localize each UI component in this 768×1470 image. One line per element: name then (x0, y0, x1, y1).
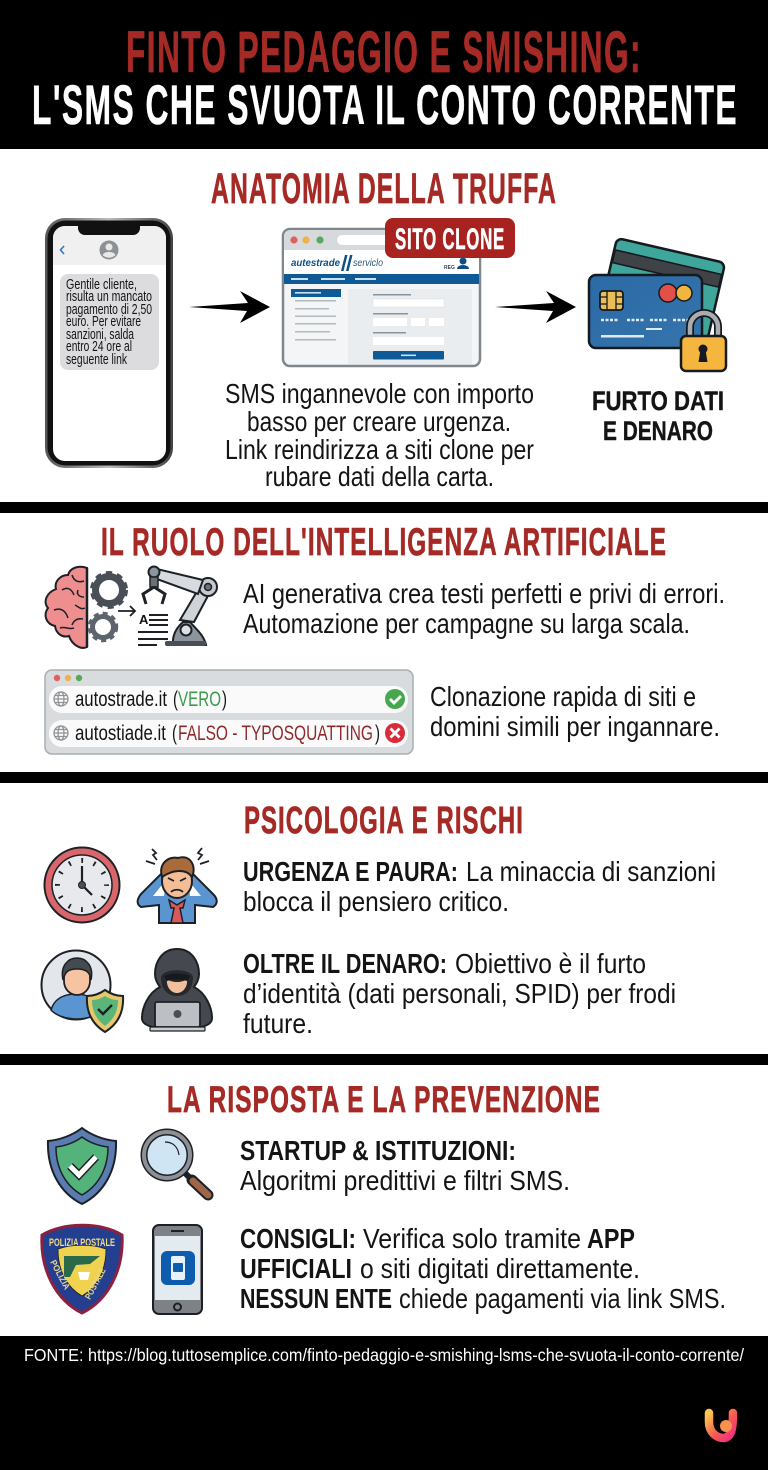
icon: smartphone with SMS: euro. Per evitare (66, 314, 141, 330)
panel: url comparison (45, 670, 413, 754)
text: consigli: APP (587, 1223, 635, 1254)
text: urgenza e paura: blocca il pensiero critico. (243, 886, 509, 917)
text: consigli: o siti digitati direttamente. (360, 1253, 640, 1284)
icon: smartphone app (153, 1225, 202, 1314)
text: oltre il denaro: d’identità (dati personali, SPID) per frodi (243, 978, 676, 1009)
panel: intelligenza artificiale (45, 521, 725, 754)
icon: smartphone with SMS: risulta un mancato (66, 289, 152, 305)
icon: green shield (48, 1128, 116, 1204)
text: oltre il denaro: Obiettivo è il furto (455, 948, 646, 979)
icon: clone website browser: REG (444, 265, 455, 271)
arrow: site to cards (495, 291, 576, 323)
arrow: phone to site (189, 291, 270, 323)
text: consigli: UFFICIALI (240, 1253, 352, 1284)
icon: logo (709, 1413, 733, 1438)
text: scam description (225, 378, 534, 492)
header banner (0, 0, 768, 149)
icon: polizia postale badge: POLIZIA POSTALE (49, 1237, 115, 1249)
text: urgenza e paura (243, 856, 716, 917)
row: falso: autostiade.it (75, 722, 166, 745)
row: falso: ) (375, 722, 380, 745)
icon: polizia postale badge: POSTALE (83, 1266, 108, 1301)
icon: brain gears robot arm: A (139, 612, 149, 627)
row: falso: FALSO - TYPOSQUATTING (178, 722, 373, 745)
text: clonazione: Clonazione rapida di siti e (430, 681, 696, 712)
panel: anatomia della truffa (45, 165, 726, 492)
text: scam description: rubare dati della carta. (265, 461, 494, 492)
icon: clone website browser (283, 229, 480, 366)
icon: hacker (142, 949, 212, 1031)
text: urgenza e paura: URGENZA E PAURA: (243, 856, 458, 887)
text: consigli: CONSIGLI: (240, 1223, 356, 1254)
text: scam description: SMS ingannevole con importo (225, 378, 534, 409)
divider band 2 (0, 772, 768, 783)
icon: cross (385, 723, 405, 743)
panel: psicologia e rischi (42, 800, 716, 1039)
icon: smartphone with SMS: pagamento di 2,50 (66, 302, 152, 318)
text: consigli: Verifica solo tramite (363, 1223, 581, 1254)
icon: credit cards with padlock (589, 238, 726, 371)
icon: stressed man (138, 848, 217, 923)
badge: sito clone (385, 218, 515, 258)
icon: check (385, 689, 405, 709)
row: vero: ) (222, 688, 227, 711)
icon: smartphone with SMS (45, 218, 173, 468)
text: furto dati e denaro: E DENARO (603, 416, 713, 446)
row: vero: ( (173, 688, 178, 711)
row: falso (75, 722, 380, 745)
heading: psicologia: PSICOLOGIA E RISCHI (244, 800, 524, 842)
text: clonazione (430, 681, 720, 742)
badge: sito clone: SITO CLONE (395, 223, 505, 256)
footer (0, 1336, 768, 1470)
text: oltre il denaro: OLTRE IL DENARO: (243, 948, 447, 979)
text: consigli (240, 1223, 726, 1314)
text: startup e istituzioni: STARTUP & ISTITUZIONI: (240, 1135, 516, 1166)
icon: polizia postale badge (42, 1225, 122, 1313)
icon: smartphone with SMS: Gentile cliente, (66, 277, 137, 293)
icon: smartphone with SMS: entro 24 ore al (66, 339, 132, 355)
text: scam description: basso per creare urgenza. (247, 406, 511, 437)
text: oltre il denaro (243, 948, 676, 1039)
icon: globe (54, 692, 68, 706)
icon: person with shield (42, 950, 123, 1032)
text: startup e istituzioni: Algoritmi predittivi e filtri SMS. (240, 1165, 570, 1196)
icon: magnifier (144, 1132, 208, 1195)
row: vero: autostrade.it (75, 688, 167, 711)
text: AI generativa: Automazione per campagne su larga scala. (243, 608, 690, 639)
icon: clock (44, 848, 120, 922)
text: scam description: Link reindirizza a siti clone per (225, 434, 534, 465)
divider band 1 (0, 502, 768, 513)
icon: clone website browser: serviclo (353, 258, 383, 269)
text: clonazione: domini simili per ingannare. (430, 711, 720, 742)
text: AI generativa (243, 578, 725, 639)
text: startup e istituzioni (240, 1135, 570, 1196)
icon: polizia postale badge: POLIZIA (48, 1258, 72, 1292)
icon: smartphone with SMS: sanzioni, salda (66, 327, 135, 343)
icon: smartphone with SMS: seguente link (66, 352, 128, 368)
divider band 3 (0, 1054, 768, 1065)
text: oltre il denaro: future. (243, 1008, 313, 1039)
text: consigli: NESSUN ENTE (240, 1283, 392, 1314)
panel: risposta e prevenzione (42, 1079, 726, 1314)
text: furto dati e denaro (592, 386, 724, 446)
icon: globe false (54, 726, 68, 740)
row: vero: VERO (178, 688, 221, 711)
text: furto dati e denaro: FURTO DATI (592, 386, 724, 416)
icon: clone website browser: autestrade (291, 257, 340, 269)
row: falso: ( (172, 722, 177, 745)
icon: brain gears robot arm (46, 566, 217, 648)
text: urgenza e paura: La minaccia di sanzioni (466, 856, 716, 887)
